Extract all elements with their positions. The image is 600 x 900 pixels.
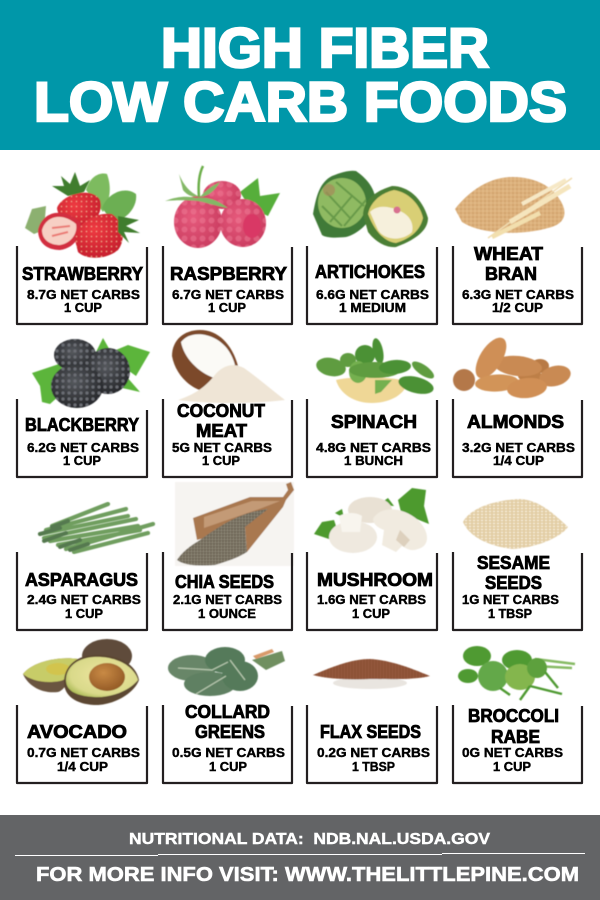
net carbs: 2.1G NET CARBS [173,593,282,607]
name: COLLARD [185,701,270,722]
net carbs: 6.3G NET CARBS [462,288,574,302]
name: ASPARAGUS [25,569,138,590]
serving: 1 CUP [65,607,103,621]
icon: blackberries [32,338,150,408]
card: mushroom [307,488,437,630]
net carbs: 1.6G NET CARBS [317,593,426,607]
card outline [163,705,292,783]
serving: 1 OUNCE [198,607,256,621]
name: RASPBERRY [170,263,288,284]
icon: mushrooms and parsley [314,488,429,553]
name: STRAWBERRY [22,263,144,284]
name: SESAME [477,552,550,573]
name: ARTICHOKES [315,261,425,282]
card outline [307,705,437,783]
name: ALMONDS [467,411,564,432]
website link: FOR MORE INFO VISIT: WWW.THELITTLEPINE.COM [36,864,579,886]
name: SPINACH [331,411,417,432]
card outline [453,246,582,324]
card: strawberry [17,172,147,324]
serving: 1/4 CUP [493,454,544,468]
icon: flax seed pile [313,659,430,689]
serving: 1 CUP [202,454,240,468]
net carbs: 8.7G NET CARBS [27,288,140,302]
card: raspberry [163,166,292,324]
card outline [163,552,292,630]
net carbs: 3.2G NET CARBS [462,441,575,455]
card outline [453,399,582,477]
name: AVOCADO [27,721,127,742]
serving: 1/2 CUP [492,301,543,315]
card: flax seeds [307,659,437,783]
icon: raspberries [165,166,280,248]
icon: chia seeds in wooden scoop [175,482,294,566]
card: collard greens: GREENS [195,721,265,742]
name: WHEAT [474,243,544,264]
icon: artichokes [313,171,428,247]
card outline [17,705,147,783]
card outline [453,552,582,630]
serving: 1 CUP [208,301,246,315]
serving: 1 CUP [63,454,101,468]
net carbs: 6.2G NET CARBS [27,441,139,455]
card: sesame seeds: SEEDS [485,572,542,593]
card outline [17,246,147,324]
icon: almonds [453,333,573,400]
name: BROCCOLI [468,705,559,726]
card outline [17,399,147,477]
serving: 1 BUNCH [344,454,403,468]
serving: 1 CUP [64,301,102,315]
net carbs: 2.4G NET CARBS [27,593,141,607]
card outline [307,399,437,477]
icon: spinach bowl [314,337,437,403]
card: broccoli rabe: RABE [491,726,540,747]
card: asparagus [17,504,153,630]
card: almonds [453,333,582,477]
card: wheat bran [453,177,582,324]
net carbs: 0.2G NET CARBS [317,746,430,760]
net carbs: 0.5G NET CARBS [172,746,285,760]
net carbs: 4.8G NET CARBS [316,441,431,455]
icon: broccoli rabe [458,646,575,700]
card outline [163,399,292,477]
card outline [307,246,437,324]
serving: 1 TBSP [488,607,532,621]
card: blackberry [17,338,150,477]
name: CHIA SEEDS [175,571,274,592]
card outline [17,552,147,630]
serving: 1 MEDIUM [339,301,406,315]
card: chia seeds [163,482,294,630]
serving: 1/4 CUP [57,760,108,774]
net carbs: 6.6G NET CARBS [316,288,429,302]
net carbs: 1G NET CARBS [462,593,559,607]
title line 2: LOW CARB FOODS [34,70,567,133]
name: BLACKBERRY [25,414,140,435]
header banner [0,0,600,150]
net carbs: 0G NET CARBS [462,746,563,760]
icon: wheat bran pile [455,177,572,238]
serving: 1 CUP [352,607,390,621]
card: sesame seeds [453,499,582,630]
icon: collard greens [168,647,285,696]
footer band [0,815,600,900]
card: artichokes [307,171,437,324]
icon: asparagus [40,504,153,552]
name: FLAX SEEDS [320,721,421,742]
title line 1: HIGH FIBER [161,16,489,79]
card: spinach [307,337,437,477]
icon: coconut and flakes [172,330,285,403]
card outline [163,246,292,324]
card outline [453,705,582,783]
card: collard greens [163,647,292,783]
name: COCONUT [177,400,266,421]
icon: avocados [23,639,139,705]
data source: NUTRITIONAL DATA: NDB.NAL.USDA.GOV [129,831,491,848]
name: MUSHROOM [317,569,433,590]
icon: strawberries [25,172,140,258]
serving: 1 TBSP [352,760,395,774]
card: wheat bran: BRAN [485,263,537,284]
card: coconut meat [163,330,292,477]
card: avocado [17,639,147,783]
net carbs: 6.7G NET CARBS [172,288,284,302]
icon: sesame seed pile [463,499,568,549]
card outline [307,552,437,630]
serving: 1 CUP [493,760,531,774]
card: coconut meat: MEAT [196,420,248,441]
card: broccoli rabe [453,646,582,783]
net carbs: 5G NET CARBS [172,441,272,455]
net carbs: 0.7G NET CARBS [27,746,140,760]
serving: 1 CUP [209,760,247,774]
